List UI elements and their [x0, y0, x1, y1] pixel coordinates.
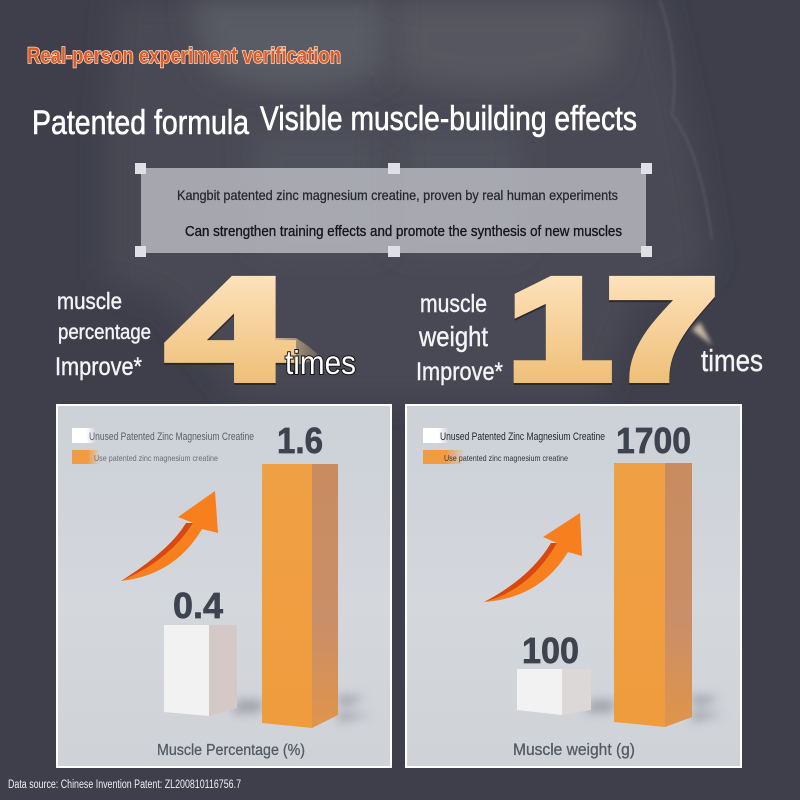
value: 1700: 1700 — [616, 420, 691, 461]
bar shadows — [585, 695, 725, 722]
title: Real-person experiment verification — [27, 43, 341, 68]
axis label: muscle percentage: Muscle Percentage (%) — [157, 742, 305, 759]
bar: 1700 orange — [614, 463, 692, 727]
bar shadows — [232, 695, 372, 722]
times label 17: times — [701, 343, 763, 378]
times label 4: times — [285, 344, 356, 381]
heading: patented formula: Patented formula — [32, 104, 249, 142]
callout box: Can strengthen training effects and promote the synthesis of new muscles — [185, 223, 622, 240]
bar: 100 white — [517, 669, 591, 715]
callout box: Kangbit patented zinc magnesium creatine, proven by real human experiments — [177, 187, 618, 203]
bar: 0.4 white — [164, 625, 237, 716]
stat label: muscle percentage improve: muscle — [57, 288, 122, 314]
legend: percentage chart: Unused Patented Zinc Magnesium Creatine — [89, 431, 254, 443]
arrow: upward trend — [484, 513, 582, 602]
value: 0.4: 0.4 — [173, 585, 223, 626]
heading: visible effects: Visible muscle-building effects — [260, 100, 637, 138]
panel: muscle percentage chart — [57, 405, 391, 767]
legend: weight chart: Unused Patented Zinc Magnesium Creatine — [440, 431, 605, 443]
legend: weight chart: Use patented zinc magnesium creatine — [444, 453, 568, 463]
stat label: muscle weight improve: muscle — [420, 290, 487, 318]
data source footnote: Data source: Chinese Invention Patent: ZL200810116756.7 — [8, 779, 241, 791]
arrow: upward trend — [121, 491, 218, 581]
legend: percentage chart: Use patented zinc magnesium creatine — [94, 453, 218, 463]
stat label: muscle percentage improve: percentage — [58, 321, 151, 344]
legend: weight chart — [423, 428, 605, 464]
stat label: muscle percentage improve — [55, 288, 151, 381]
axis label: muscle weight: Muscle weight (g) — [513, 740, 635, 759]
legend: percentage chart — [72, 428, 254, 464]
value: 1.6: 1.6 — [277, 420, 323, 461]
stat label: muscle weight improve — [416, 290, 503, 386]
big number 17: 1 — [507, 249, 612, 410]
stat label: muscle weight improve: weight — [418, 321, 488, 352]
callout box — [135, 163, 652, 257]
value: 100: 100 — [522, 630, 579, 671]
stat label: muscle percentage improve: Improve* — [55, 353, 142, 381]
background: blurred muscular torso — [105, 0, 712, 400]
big number 17: 7 — [606, 249, 718, 410]
panel: muscle weight chart — [406, 405, 741, 767]
big number 4: 4 — [167, 249, 291, 410]
bar: 1.6 orange — [262, 464, 338, 728]
big number 17 — [507, 249, 718, 410]
stat label: muscle weight improve: Improve* — [416, 358, 503, 386]
